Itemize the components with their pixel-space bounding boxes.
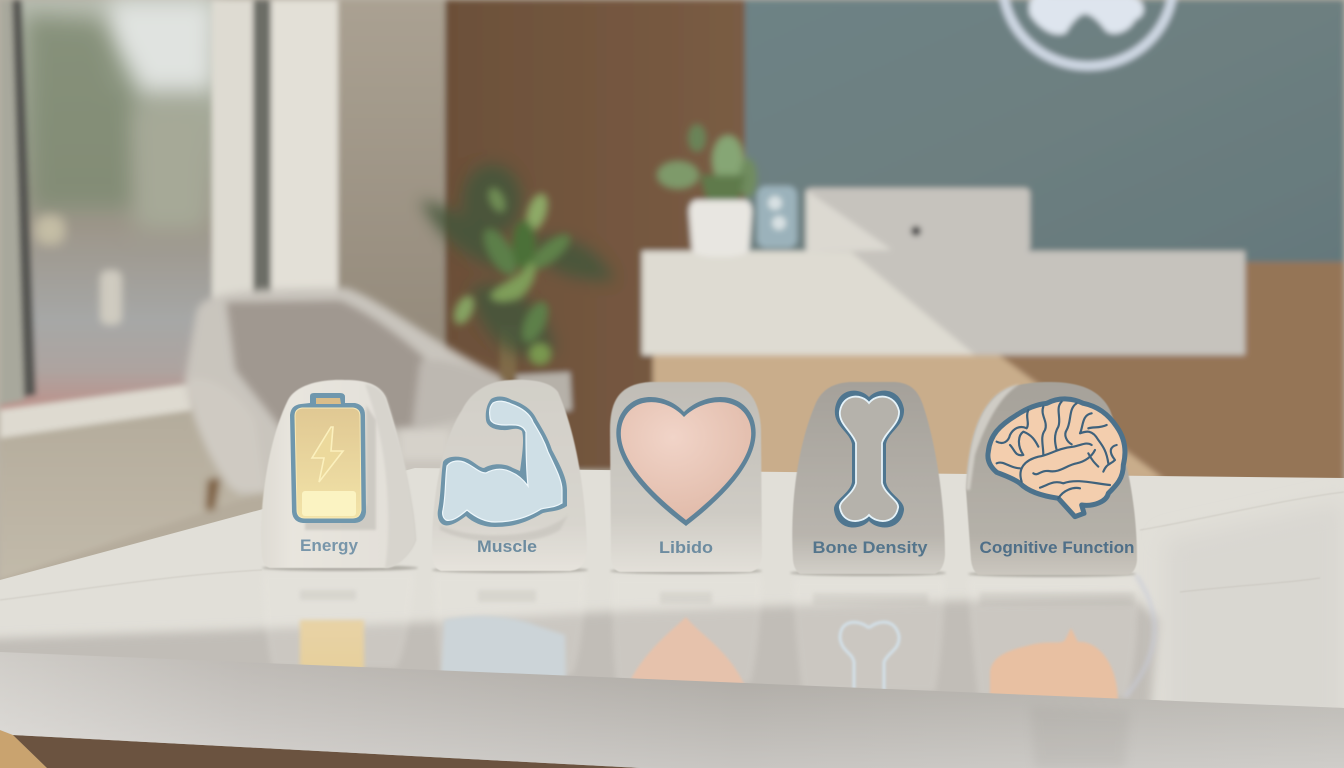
- figure: Energy: [261, 380, 418, 571]
- reflection: brain: [990, 628, 1118, 702]
- side facet: [365, 384, 416, 568]
- body: [966, 382, 1137, 575]
- reflection: battery: [300, 620, 364, 670]
- icon: brain: [988, 399, 1125, 517]
- figure: Cognitive Function: [966, 382, 1137, 577]
- body: [610, 382, 762, 572]
- figure: Muscle: Muscle: [477, 537, 537, 556]
- bottle: [757, 186, 797, 248]
- table front edge: [0, 652, 1344, 768]
- reflection: bluish edge of glass: [1125, 575, 1155, 697]
- dark wood base beneath table: [13, 735, 640, 768]
- figure: Libido: [610, 382, 762, 574]
- figure: Bone Density: [790, 382, 946, 576]
- icon: flexed arm: [438, 396, 568, 542]
- large potted plant: [420, 164, 615, 420]
- shadow band on table: [0, 596, 1160, 720]
- plant lit leaves: [450, 185, 575, 365]
- left highlight: [966, 384, 1020, 490]
- floor corner: [0, 730, 47, 768]
- label: Energy: [300, 536, 359, 555]
- reflection: mirrored label ghosts: [300, 590, 1135, 606]
- reflections of figures in the table: [262, 572, 1155, 702]
- marble table top: [0, 468, 1344, 730]
- reflection: heart: [626, 617, 747, 690]
- icon: bone: [834, 391, 904, 527]
- reflection: muscle: [441, 616, 566, 680]
- plant dark fronds: [420, 164, 615, 356]
- brain folds: [997, 402, 1117, 498]
- wall below the window: [0, 384, 270, 580]
- reception desk: [642, 251, 1293, 485]
- lightning bolt: [312, 427, 343, 482]
- right wood wall: [1240, 262, 1344, 487]
- figure: Libido: Libido: [659, 538, 713, 557]
- contact shadow: [262, 565, 418, 571]
- monitor box on desk: [806, 188, 1030, 252]
- icon: battery: [290, 393, 376, 530]
- wall logo: [1003, 0, 1173, 66]
- figure: Muscle: [432, 380, 588, 573]
- right side of table: [1165, 500, 1344, 730]
- body: [261, 380, 416, 568]
- figure: Cognitive Function: Cognitive Function: [980, 538, 1134, 557]
- window frame and pillars: [212, 0, 446, 370]
- row of five ceramic figures: [261, 380, 1137, 577]
- icon: heart: [616, 397, 756, 526]
- armchair: [185, 288, 505, 510]
- blue-grey accent wall: [745, 0, 1344, 266]
- figure: Bone Density: Bone Density: [812, 538, 928, 557]
- window with blurred outdoor view: [0, 0, 214, 410]
- wood wall panel: [445, 0, 747, 470]
- body: [432, 380, 587, 571]
- body: [792, 382, 945, 574]
- reflection: figure bodies: [262, 572, 1137, 697]
- reflection: bone: [840, 622, 899, 695]
- small potted plant: [657, 124, 757, 257]
- charge bar: [302, 491, 356, 516]
- marble veins: [0, 492, 1344, 600]
